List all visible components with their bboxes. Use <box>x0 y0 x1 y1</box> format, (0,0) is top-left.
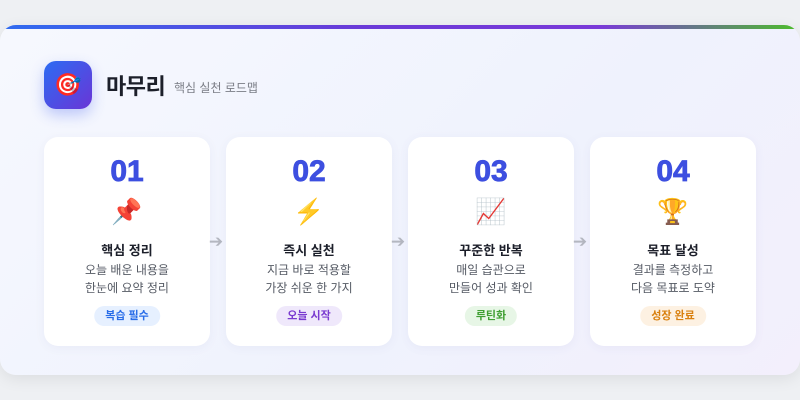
subtitle: 핵심 실천 로드맵 <box>174 81 258 95</box>
arrow: ➔ <box>209 232 223 251</box>
card: 04: 다음 목표로 도약 <box>631 281 715 295</box>
card: 03: 📈 <box>475 198 507 226</box>
card: 04 <box>590 137 756 346</box>
card: 01: 복습 필수 <box>105 310 149 322</box>
card: 04: 04 <box>656 155 690 188</box>
icon: target <box>44 61 92 109</box>
arrow: ➔ <box>391 232 405 251</box>
icon: target: 🎯 <box>54 72 82 97</box>
card: 03: 매일 습관으로 <box>456 263 526 277</box>
card: 04: 성장 완료 <box>651 310 695 322</box>
card: 02: 지금 바로 적용할 <box>267 263 351 277</box>
card: 02: 즉시 실천 <box>283 243 335 258</box>
card: 01: 01 <box>110 155 144 188</box>
card: 02 <box>226 137 392 346</box>
card: 02: 오늘 시작 <box>287 310 331 322</box>
card: 01: 오늘 배운 내용을 <box>85 263 169 277</box>
card: 02: ⚡ <box>293 198 325 226</box>
card: 01: 한눈에 요약 정리 <box>85 281 169 295</box>
card: 03: 03 <box>474 155 508 188</box>
card: 01: 📌 <box>111 198 143 226</box>
card: 03: 꾸준한 반복 <box>459 243 523 258</box>
card: 01 <box>44 137 210 346</box>
card: 04: 🏆 <box>657 198 689 226</box>
card: 02: 가장 쉬운 한 가지 <box>265 281 353 295</box>
card: 02: 02 <box>292 155 326 188</box>
card: 04: 결과를 측정하고 <box>633 263 713 277</box>
card: 03: 만들어 성과 확인 <box>449 281 533 295</box>
card: 03: 루틴화 <box>476 310 506 322</box>
card: 04: 목표 달성 <box>647 243 699 258</box>
card: 01: 핵심 정리 <box>101 243 153 258</box>
title: 마무리 <box>106 74 165 99</box>
arrow: ➔ <box>573 232 587 251</box>
card: 03 <box>408 137 574 346</box>
